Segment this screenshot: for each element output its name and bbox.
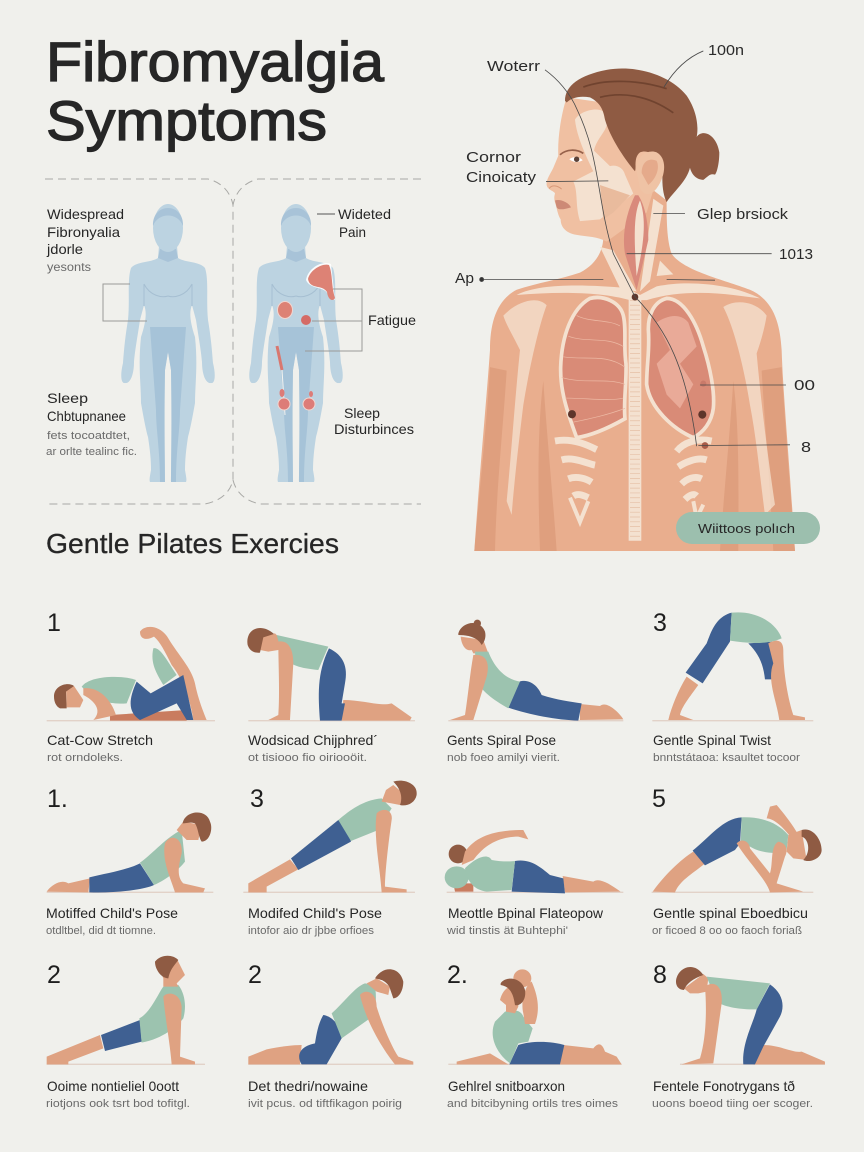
label: sleep left: Chbtupnanee (47, 408, 126, 424)
label: wideted pain: Pain (339, 224, 366, 240)
captions: row 1: nob foeo amilyi vierit. (447, 752, 560, 764)
pill label: Wiittoos polıch (698, 521, 795, 536)
exercise 9 (47, 956, 205, 1064)
label: 8: 8 (801, 439, 811, 456)
captions: row 1 (47, 732, 800, 764)
exercise 1 (47, 609, 215, 721)
exercise 8 (652, 785, 822, 892)
captions: row 1: Gentle Spinal Twist (653, 732, 771, 748)
captions: row 3: uoons boeod tiing oer scoger. (652, 1098, 813, 1110)
label: sleep right (334, 405, 414, 437)
captions: row 3: ivit pcus. od tiftfikagon poirig (248, 1098, 402, 1110)
label: 1013: 1013 (779, 246, 813, 263)
exercise 7 (445, 830, 623, 893)
label: cornor cinoicaty (466, 149, 537, 186)
exercise 2 (247, 628, 415, 721)
exercise 4 (652, 609, 813, 721)
captions: row 2: otdltbel, did dt tiomne. (46, 925, 156, 937)
exercise 12 (653, 961, 825, 1064)
label: sleep left: fets tocoatdtet, (47, 430, 130, 442)
title: Fibromyalgia (46, 30, 385, 93)
label: glep brsiock: Glep brsiock (697, 206, 789, 223)
captions: row 1: ot tisiooo fio oiriooöit. (248, 752, 367, 764)
exercise 6 (243, 781, 417, 892)
exercise 11: 2. (447, 961, 468, 989)
anatomy: ear (637, 151, 664, 194)
exercise 5 (47, 785, 213, 892)
title (46, 30, 385, 152)
exercise 6: 3 (250, 785, 264, 813)
captions: row 3: riotjons ook tsrt bod tofitgl. (46, 1098, 190, 1110)
label: 100n: 100n (708, 42, 744, 59)
label: cornor cinoicaty: Cinoicaty (466, 169, 537, 186)
figure: front body left (121, 204, 215, 482)
anatomy: hair (565, 69, 719, 202)
exercise 11 (447, 961, 622, 1064)
captions: row 1: Cat-Cow Stretch (47, 732, 153, 748)
label: sleep left: Sleep (47, 390, 88, 406)
anatomy: torso silhouette (474, 175, 795, 551)
captions: row 2: Modifed Child's Pose (248, 905, 382, 921)
captions: row 1: Wodsicad Chijphred´ (248, 732, 378, 748)
captions: row 2 (46, 905, 808, 937)
label: widespread: jdorle (46, 241, 83, 257)
captions: row 1: Gents Spiral Pose (447, 732, 556, 748)
anatomy: spine (616, 298, 654, 541)
exercise 4: 3 (653, 609, 667, 637)
label: widespread: Fibronyalia (47, 224, 120, 240)
panel: body comparison (45, 179, 421, 504)
anatomy: arm shading (474, 367, 795, 551)
label: widespread: Widespread (47, 206, 124, 222)
label: fatigue: Fatigue (368, 312, 416, 328)
anatomy: clavicle and shoulders (503, 283, 775, 515)
anatomy: neck structures (600, 195, 673, 292)
anatomy: marker dots (568, 294, 708, 449)
captions: row 2: Gentle spinal Eboedbicu (653, 905, 808, 921)
captions: row 3: Fentele Fonotrygans tð (653, 1078, 795, 1094)
exercise 1: 1 (47, 609, 61, 637)
label: sleep right: Sleep (344, 405, 380, 421)
label: wideted pain: Wideted (338, 206, 391, 222)
label: widespread (46, 206, 124, 274)
captions: row 2: wid tinstis ät Buhtephi' (446, 925, 568, 937)
label: sleep right: Disturbinces (334, 421, 414, 437)
exercise 8: 5 (652, 785, 666, 813)
label: sleep left: ar orlte tealinc fic. (46, 446, 137, 458)
exercise 12: 8 (653, 961, 667, 989)
anatomy: eye and mouth (549, 150, 583, 209)
heading: exercises: Gentle Pilates Exercies (46, 528, 339, 559)
captions: row 3 (46, 1078, 813, 1110)
label: sleep left (46, 390, 137, 458)
panel: anatomy illustration (455, 42, 820, 551)
captions: row 3: Gehlrel snitboarxon (448, 1078, 565, 1094)
label: woterr: Woterr (487, 58, 540, 75)
captions: row 3: Det thedri/nowaine (248, 1078, 368, 1094)
anatomy: face (547, 97, 660, 242)
title: Symptoms (46, 89, 327, 152)
label: wideted pain (338, 206, 391, 240)
captions: row 2: Motiffed Child's Pose (46, 905, 178, 921)
exercise 10: 2 (248, 961, 262, 989)
figure: front body right with pain points (249, 204, 343, 482)
anatomy: leader lines (480, 51, 790, 446)
captions: row 2: intofor aio dr jþbe orfioes (248, 925, 375, 937)
captions: row 1: bnntstátaoa: ksaultet tocoor (653, 752, 800, 764)
captions: row 3: Ooime nontieliel 0oott (47, 1078, 179, 1094)
exercise 3 (448, 620, 623, 721)
exercise 9: 2 (47, 961, 61, 989)
anatomy: lungs (561, 298, 714, 438)
label: widespread: yesonts (47, 260, 91, 274)
exercise 10 (248, 961, 413, 1064)
captions: row 3: and bitcibyning ortils tres oimes (447, 1098, 619, 1110)
exercise 5: 1. (47, 785, 68, 813)
pill label (676, 512, 820, 544)
label: 00: 00 (794, 377, 815, 394)
captions: row 1: rot orndoleks. (47, 752, 123, 764)
anatomy: facial muscle overlay (573, 109, 633, 221)
label: cornor cinoicaty: Cornor (466, 149, 521, 166)
anatomy: lower ribs (555, 440, 712, 522)
label: ap: Ap (455, 270, 474, 287)
captions: row 2: or ficoed 8 oo oo faoch foriaß (652, 925, 802, 937)
captions: row 2: Meottle Bpinal Flateopow (448, 905, 604, 921)
